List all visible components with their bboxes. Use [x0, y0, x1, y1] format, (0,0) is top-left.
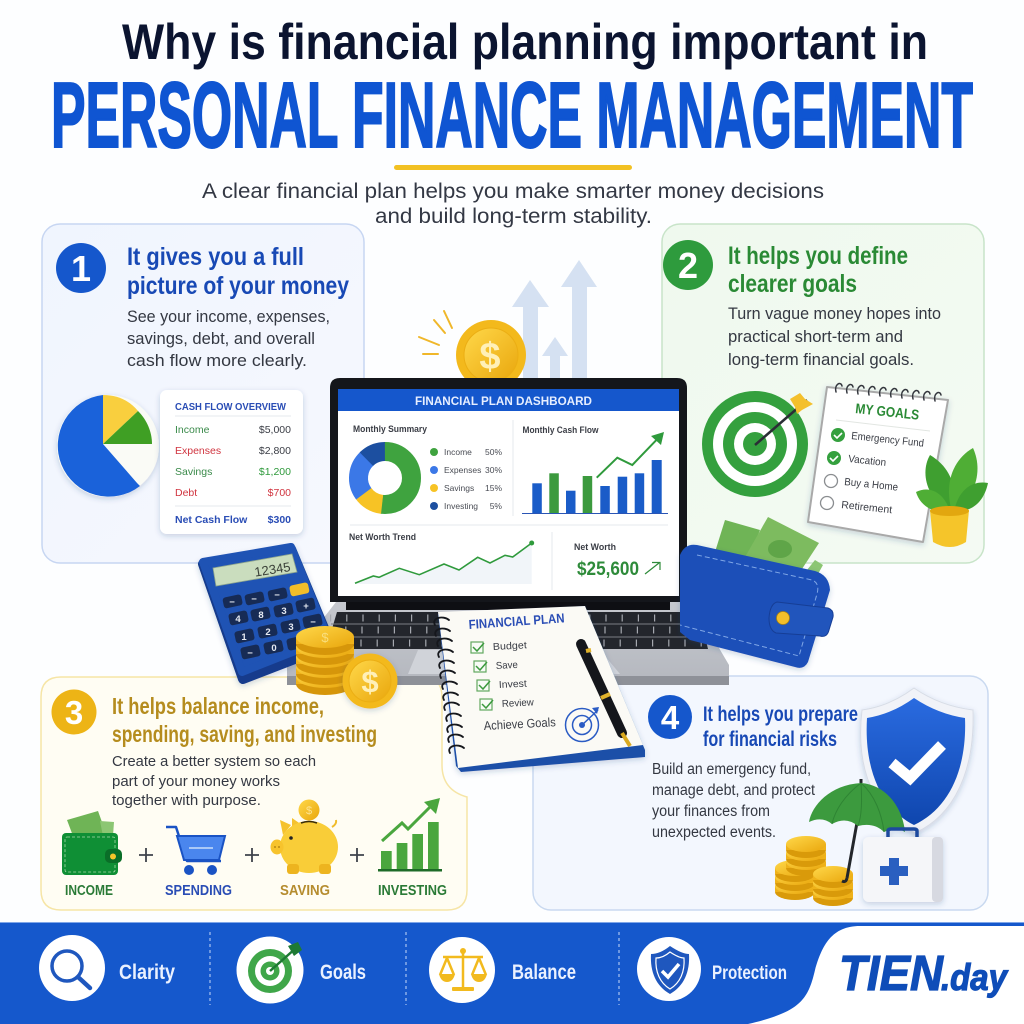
category labels: [65, 883, 447, 899]
monthly summary donut: Expenses: [444, 465, 481, 475]
goals notepad: Buy a Home: [844, 476, 899, 494]
panel 2: define clearer goals: [662, 224, 988, 563]
panel 3: balance income, spending, saving, investing: [41, 677, 467, 910]
cash flow overview card: $700: [268, 487, 291, 499]
monthly summary donut: 30%: [485, 465, 502, 475]
badge 3: [52, 690, 96, 734]
panel 1: full picture of your money: [42, 224, 364, 563]
net worth value: [574, 542, 660, 580]
icon: blue calculator: +: [303, 601, 309, 612]
heading 3: It helps balance income,: [112, 693, 324, 719]
badge 1: 1: [71, 248, 91, 289]
category labels: INCOME: [65, 883, 113, 899]
icon: investing growth chart: [378, 798, 442, 872]
notebook checklist: Review: [502, 697, 535, 710]
goals notepad: Emergency Fund: [851, 430, 925, 450]
item: goals: Goals: [320, 961, 366, 984]
icon: saving piggy bank: [270, 800, 338, 874]
heading 4: for financial risks: [703, 728, 837, 751]
item: clarity: [39, 935, 175, 1001]
heading 1: It gives you a full: [127, 243, 304, 271]
icon: blue calculator: −: [247, 648, 253, 659]
category labels: SPENDING: [165, 883, 232, 899]
body 3: Create a better system so each: [112, 753, 316, 770]
monthly cash flow chart: Monthly Cash Flow: [522, 425, 599, 436]
icon: green umbrella: [809, 779, 905, 882]
logo area: [748, 926, 1024, 1024]
body 4: unexpected events.: [652, 824, 776, 841]
monthly summary donut: Monthly Summary: [353, 424, 428, 435]
coin above laptop: $: [479, 336, 501, 378]
heading 1: [127, 243, 349, 300]
icon: coin stack and dollar coin: $: [321, 630, 329, 645]
icon: income wallet: [62, 811, 122, 875]
icon: first aid kit: [863, 829, 943, 902]
icon: blue calculator: 2: [265, 627, 271, 638]
icon: spending cart: [166, 827, 225, 875]
subtitle: A clear financial plan helps you make smarter money decisions: [202, 180, 824, 203]
badge 2: [663, 240, 713, 290]
notebook checklist: Budget: [493, 640, 527, 653]
body 2: practical short-term and: [728, 328, 903, 346]
subtitle: and build long-term stability.: [375, 205, 652, 228]
net worth trend chart: Net Worth Trend: [349, 532, 416, 543]
icon: blue calculator: [203, 547, 331, 679]
financial plan notebook: [434, 606, 645, 772]
body 2: Turn vague money hopes into: [728, 305, 941, 323]
item: clarity: Clarity: [119, 961, 175, 984]
goals notepad: [808, 384, 948, 542]
heading 4: [703, 703, 858, 751]
icon: blue calculator: −: [251, 594, 257, 605]
notebook checklist: [471, 640, 556, 733]
icon: blue calculator: 0: [271, 643, 277, 654]
monthly cash flow chart: [522, 425, 668, 514]
goals notepad: Vacation: [848, 453, 887, 469]
body 4: Build an emergency fund,: [652, 761, 811, 778]
cash flow overview card: Income: [175, 424, 210, 436]
body 1: [127, 308, 330, 370]
icon: coin stack and dollar coin: $: [361, 664, 379, 699]
panel 4: prepare for financial risks: [533, 676, 988, 910]
net worth value: Net Worth: [574, 542, 616, 553]
body 1: See your income, expenses,: [127, 308, 330, 326]
heading 1: picture of your money: [127, 272, 349, 300]
icon: blue calculator: 1: [241, 632, 247, 643]
heading 2: It helps you define: [728, 242, 908, 270]
footer band: [0, 922, 1024, 1024]
monthly summary donut: Savings: [444, 483, 474, 493]
icon: blue calculator: 8: [258, 610, 264, 621]
title: [51, 14, 973, 167]
icon: potted plant: [916, 448, 988, 547]
laptop base: [287, 602, 729, 685]
badge 1: [56, 243, 106, 293]
icon: saving piggy bank: $: [306, 805, 312, 817]
notebook checklist: Achieve Goals: [483, 715, 556, 733]
goals notepad: Retirement: [841, 499, 893, 516]
laptop screen bezel: [330, 378, 687, 602]
notebook target: [566, 707, 599, 742]
body 2: [728, 305, 941, 369]
heading 3: [112, 693, 377, 747]
body 3: [112, 753, 316, 809]
cash flow overview card: [160, 390, 303, 534]
title underline: [394, 165, 632, 170]
dashboard header: FINANCIAL PLAN DASHBOARD: [415, 396, 592, 408]
plus sign: [139, 848, 153, 862]
background growth arrows: [512, 260, 597, 380]
icon: target with arrow: [702, 391, 813, 497]
body 1: cash flow more clearly.: [127, 352, 307, 370]
icon: coin stack and dollar coin: [296, 626, 398, 708]
badge 4: 4: [661, 699, 680, 736]
icon: shield with check: [861, 688, 973, 833]
monthly summary donut: Investing: [444, 501, 478, 511]
cash flow overview card: Expenses: [175, 445, 221, 457]
badge 2: 2: [678, 245, 698, 286]
icon: blue calculator: 12345: [253, 559, 291, 580]
category labels: SAVING: [280, 883, 330, 899]
body 4: manage debt, and protect: [652, 782, 816, 799]
goals notepad: MY GOALS: [855, 400, 920, 423]
item: protection: Protection: [712, 963, 787, 984]
notebook checklist: Save: [496, 660, 519, 672]
net worth value: $25,600: [577, 559, 639, 580]
cash flow overview card: $300: [268, 514, 291, 526]
body 4: [652, 761, 816, 841]
monthly summary donut: [348, 424, 502, 515]
icon: blue calculator: −: [274, 590, 280, 601]
cash flow overview card: Savings: [175, 466, 212, 478]
monthly summary donut: 50%: [485, 447, 502, 457]
net worth trend chart: [349, 532, 534, 584]
notebook heading: FINANCIAL PLAN: [468, 610, 565, 632]
item: balance: Balance: [512, 961, 576, 984]
heading 4: It helps you prepare: [703, 703, 858, 726]
pie chart: [57, 395, 159, 497]
icon: blue wallet with cash: [680, 517, 833, 668]
subtitle: [202, 180, 824, 228]
icon: coin stacks: [775, 836, 853, 906]
icon: blue calculator: 4: [235, 614, 241, 625]
heading 2: [728, 242, 908, 298]
icon: blue calculator: 3: [288, 622, 294, 633]
logo: TIEN.day: TIEN: [839, 947, 944, 1001]
body 3: part of your money works: [112, 773, 280, 790]
cash flow overview card: CASH FLOW OVERVIEW: [175, 401, 286, 413]
plus sign: [350, 848, 364, 862]
category labels: INVESTING: [378, 883, 447, 899]
icon: blue calculator: −: [310, 617, 316, 628]
body 3: together with purpose.: [112, 792, 261, 809]
cash flow overview card: Debt: [175, 487, 197, 499]
logo: TIEN.day: .day: [941, 957, 1009, 998]
monthly summary donut: 5%: [490, 501, 502, 511]
icon: blue calculator: 3: [281, 606, 287, 617]
central illustration: laptop: [287, 311, 729, 685]
cash flow overview card: Net Cash Flow: [175, 514, 248, 526]
coin above laptop: [419, 311, 526, 390]
monthly summary donut: 15%: [485, 483, 502, 493]
icon: blue calculator: −: [229, 597, 235, 608]
item: goals: [236, 936, 366, 1004]
dashboard screen: [338, 389, 679, 596]
cash flow overview card: $2,800: [259, 445, 291, 457]
item: protection: [637, 937, 787, 1001]
heading 3: spending, saving, and investing: [112, 721, 377, 747]
monthly summary donut: Income: [444, 447, 472, 457]
item: balance: [429, 937, 576, 1003]
plus sign: [245, 848, 259, 862]
notebook spiral: [434, 618, 464, 753]
badge 3: 3: [65, 694, 83, 731]
cash flow overview card: $1,200: [259, 466, 291, 478]
cash flow overview card: $5,000: [259, 424, 291, 436]
notebook checklist: Invest: [499, 679, 527, 691]
body 4: your finances from: [652, 803, 770, 820]
title: Why is financial planning important in: [122, 14, 928, 70]
pen: [581, 644, 630, 746]
dashboard header: [338, 389, 679, 411]
badge 4: [648, 695, 692, 739]
body 1: savings, debt, and overall: [127, 330, 315, 348]
logo: TIEN.day: [839, 947, 1009, 1001]
body 2: long-term financial goals.: [728, 351, 914, 369]
heading 2: clearer goals: [728, 270, 857, 298]
